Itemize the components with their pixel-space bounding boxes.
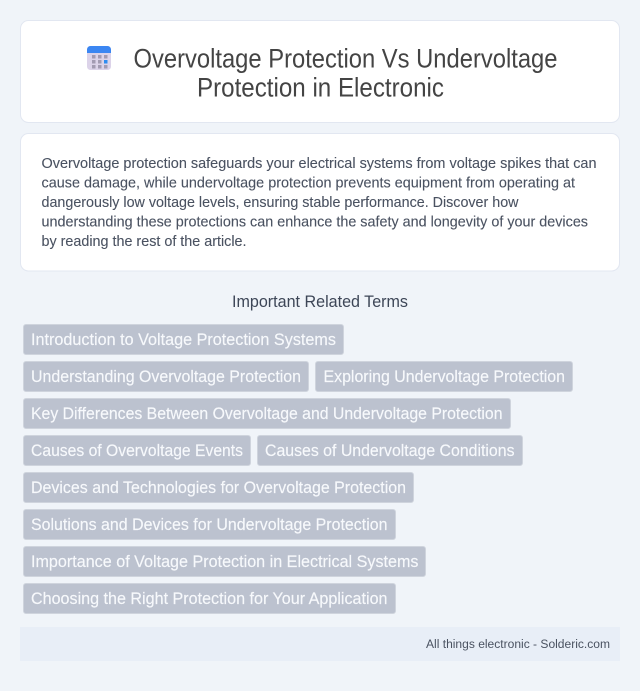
tag: introduction	[24, 324, 344, 354]
intro paragraph: cause damage, while undervoltage protection prevents equipment from operating at	[42, 176, 575, 192]
tag: introduction: Introduction to Voltage Protection Systems	[31, 330, 336, 349]
title: Protection in Electronic	[197, 72, 444, 102]
intro paragraph: understanding these protections can enhance the safety and longevity of your devices	[42, 214, 588, 230]
intro paragraph: dangerously low voltage levels, ensuring stable performance. Discover how	[42, 195, 519, 211]
panel: title card	[20, 20, 620, 122]
tag: causes of undervoltage: Causes of Undervoltage Conditions	[265, 441, 514, 460]
tag: choosing protection: Choosing the Right Protection for Your Application	[31, 589, 388, 608]
heading: important related terms: Important Related Terms	[232, 293, 408, 311]
tag: undervoltage solutions	[24, 510, 396, 540]
intro paragraph: by reading the rest of the article.	[42, 234, 246, 250]
tag: understanding overvoltage	[24, 362, 308, 392]
footer	[20, 627, 620, 661]
tag: key differences: Key Differences Between Overvoltage and Undervoltage Protection	[31, 404, 502, 423]
intro paragraph	[42, 156, 596, 250]
tag: undervoltage solutions: Solutions and Devices for Undervoltage Protection	[31, 515, 388, 534]
title: Overvoltage Protection Vs Undervoltage	[134, 44, 558, 74]
tag: exploring undervoltage	[316, 362, 572, 392]
tag: causes of undervoltage	[258, 436, 522, 466]
tag: overvoltage devices	[24, 472, 414, 502]
tag: causes of overvoltage	[24, 436, 250, 466]
title	[134, 44, 558, 102]
tag: exploring undervoltage: Exploring Undervoltage Protection	[324, 367, 565, 386]
tag: key differences	[24, 398, 510, 428]
icon: calendar	[87, 46, 111, 70]
panel: introduction text	[20, 134, 620, 271]
tag: causes of overvoltage: Causes of Overvoltage Events	[31, 441, 243, 460]
tag: overvoltage devices: Devices and Technologies for Overvoltage Protection	[31, 478, 406, 497]
tag: choosing protection	[24, 584, 396, 614]
footer: All things electronic - Solderic.com	[426, 637, 610, 651]
tag: understanding overvoltage: Understanding Overvoltage Protection	[31, 367, 301, 386]
tag: importance	[24, 546, 426, 576]
tag: importance: Importance of Voltage Protection in Electrical Systems	[31, 552, 418, 571]
intro paragraph: Overvoltage protection safeguards your electrical systems from voltage spikes that can	[42, 156, 596, 172]
